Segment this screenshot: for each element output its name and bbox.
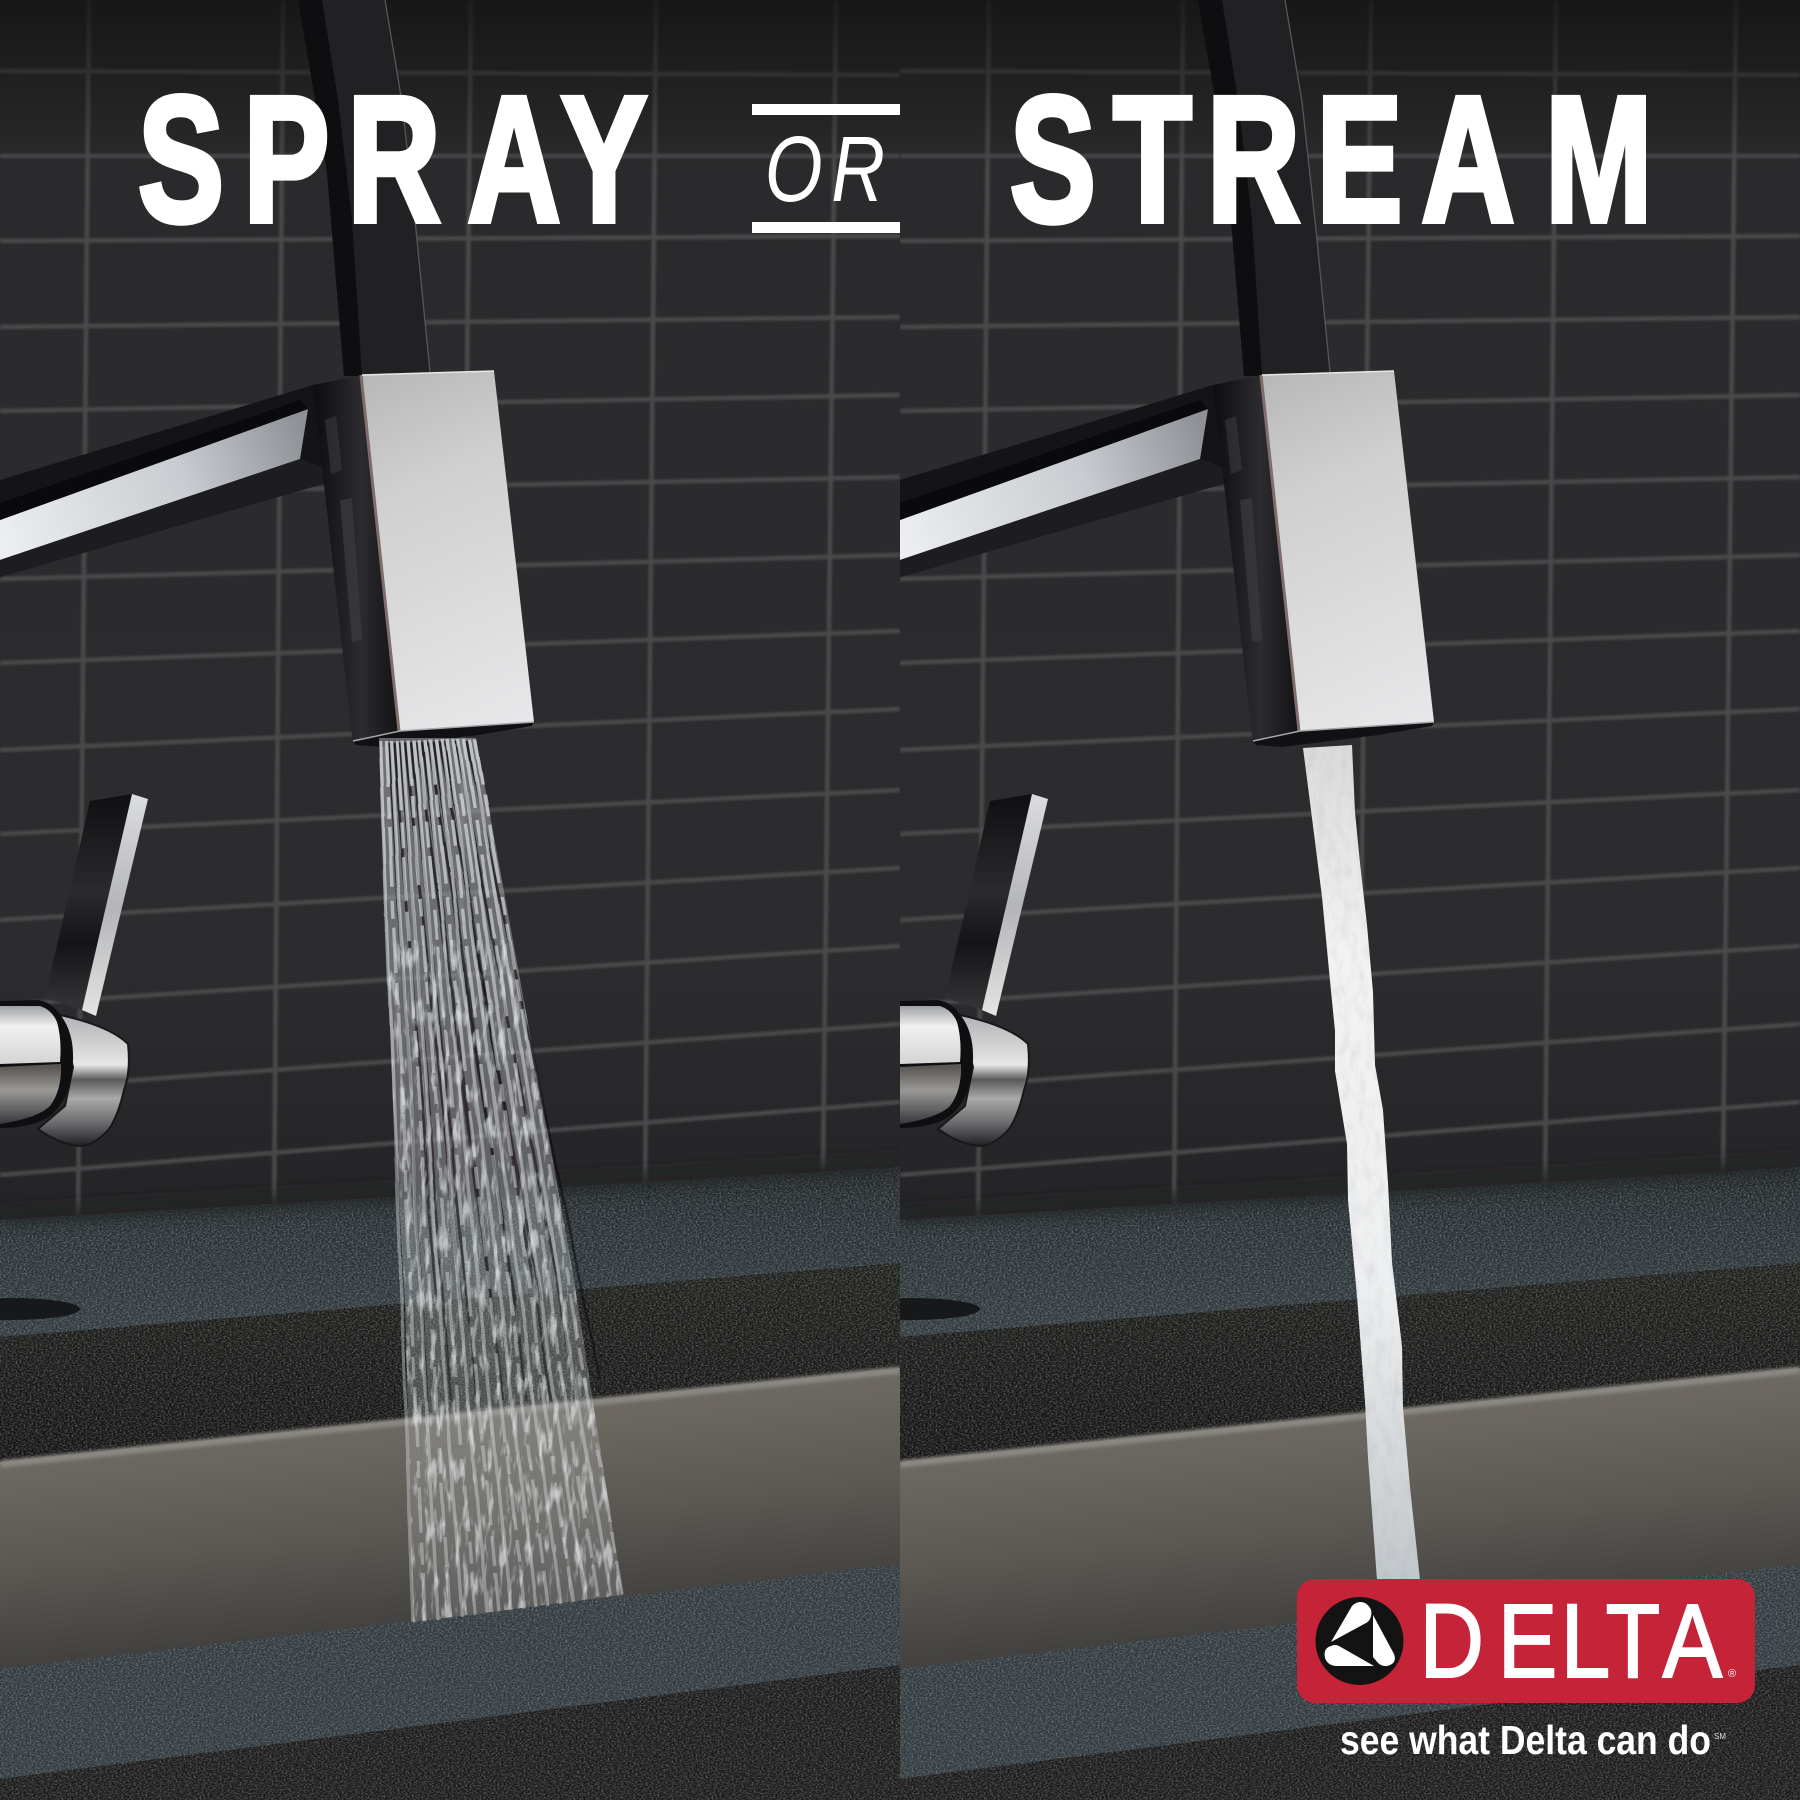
spray water droplets [388,940,623,1622]
spray bright strands [380,740,622,1622]
spray dark gaps [389,742,600,1400]
delta logo [1297,1579,1755,1703]
water stream [1303,745,1420,1579]
faucet arm [0,385,330,577]
logo wordmark: DELTA [1420,1582,1722,1700]
upper countertop [0,1165,900,1462]
faucet spray head [313,371,534,747]
tagline: SM [1714,1732,1726,1741]
panel: spray [0,0,900,1800]
front countertop [0,1564,900,1800]
kitchen scene: wall, counter, sink and faucet [0,0,900,1800]
panel: stream [844,0,1800,1800]
faucet hose [298,0,430,376]
spray haze [379,738,623,1622]
title: spray: SPRAY [138,60,647,260]
faucet base [0,1000,129,1146]
title: or, between rules [752,104,900,233]
water spray [370,738,630,1630]
tile backsplash [0,0,900,1240]
registered mark: ® [1728,1668,1736,1680]
faucet handle lever [45,794,148,1016]
title: or, between rules: OR [765,117,885,221]
logo triangle emblem [1316,1597,1404,1685]
title: stream: STREAM [1010,60,1652,260]
steel sink basin [0,1368,900,1675]
kitchen scene copy [844,0,1800,1800]
tagline: see what Delta can do [1340,1717,1711,1763]
logo red badge [1297,1579,1755,1703]
